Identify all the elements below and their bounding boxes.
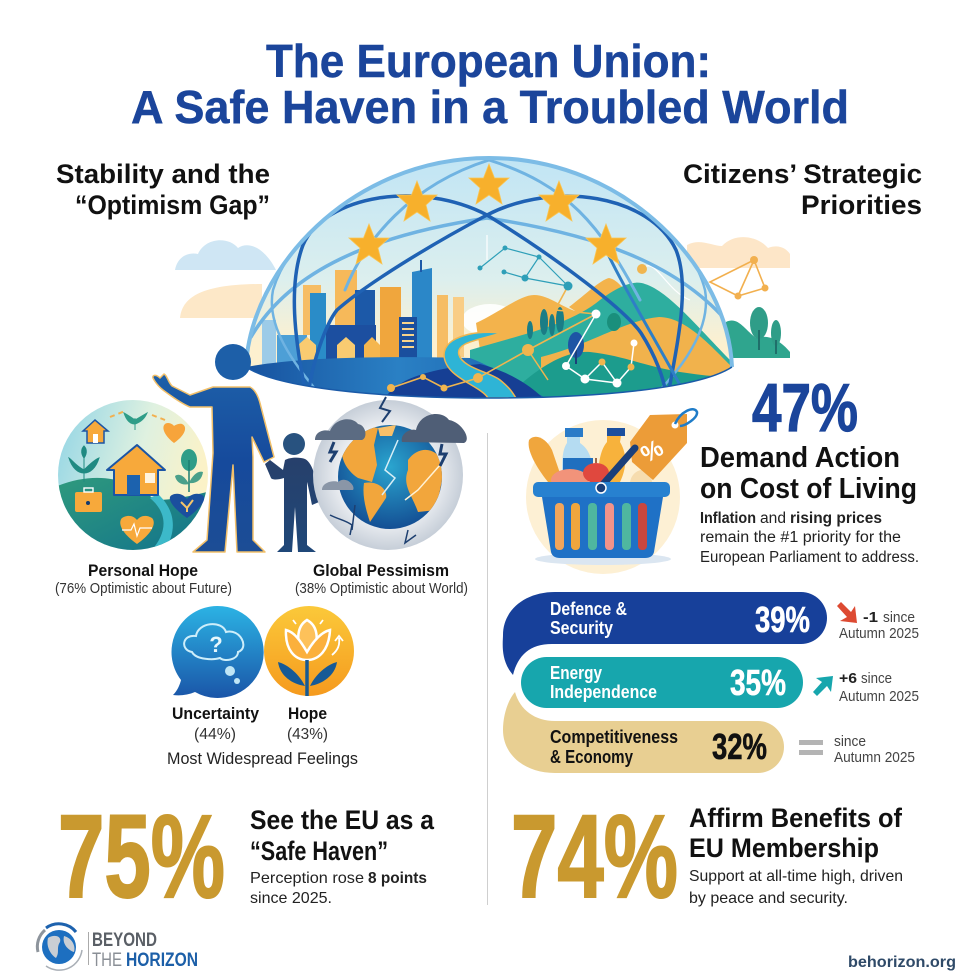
trend: defence down 1: -1 [863, 609, 878, 626]
trend: competitiveness unchanged [799, 733, 915, 766]
label: hope [287, 704, 328, 743]
stat: 74 percent affirm benefits: 74% [511, 791, 678, 923]
adult figure [153, 344, 274, 552]
child figure [265, 433, 319, 552]
label: uncertainty [172, 704, 260, 743]
website url: behorizon.org [848, 954, 956, 971]
ribbon bar: energy independence: 35% [730, 662, 786, 703]
stat: 47 percent: 47% [752, 370, 858, 446]
heading: demand action on cost of living: on Cost of Living [700, 473, 917, 505]
heading: demand action on cost of living [700, 442, 917, 505]
label: global pessimism: Global Pessimism [313, 561, 449, 580]
label: personal hope: (76% Optimistic about Future) [55, 580, 232, 597]
stat: 74 percent affirm benefits: Support at all-time high, driven [689, 868, 903, 885]
label: personal hope [55, 561, 232, 597]
divider [487, 433, 488, 905]
stat: 74 percent affirm benefits [511, 791, 903, 923]
ribbon bar: competitiveness and economy [503, 692, 784, 773]
ribbon bar: energy independence: Energy [550, 663, 602, 683]
title: The European Union: [266, 35, 711, 87]
stat: 74 percent affirm benefits: Affirm Benefits of [689, 803, 903, 833]
heading: stability and the optimism gap: Stability and the [56, 159, 270, 189]
text: cost of living explanation: rising prices [790, 510, 882, 527]
ribbon bar: defence and security: Security [550, 618, 613, 638]
label: global pessimism [295, 561, 468, 597]
heading: citizens strategic priorities: Citizens’ Strategic [683, 159, 922, 189]
icon: personal hope circle [58, 400, 208, 550]
text: cost of living explanation: Inflation [700, 510, 756, 527]
title [131, 35, 849, 133]
heading: stability and the optimism gap [56, 159, 270, 220]
price tag: % [636, 434, 668, 469]
icon: uncertainty speech bubble: ? [209, 632, 223, 657]
logo: beyond the horizon [37, 924, 198, 971]
trend: defence down 1: since [883, 609, 915, 626]
stat: 75 percent safe haven: “Safe Haven” [250, 836, 388, 866]
ribbon bar: competitiveness and economy: Competitiveness [550, 727, 678, 747]
stat: 75 percent safe haven: Perception rose [250, 870, 364, 887]
logo: beyond the horizon: HORIZON [126, 950, 198, 971]
EU stars [349, 164, 626, 264]
caption: most widespread feelings: Most Widespread Feelings [167, 749, 358, 768]
stat: 75 percent safe haven [58, 791, 435, 923]
heading: stability and the optimism gap: “Optimism Gap” [75, 190, 270, 220]
city skyline [262, 260, 518, 365]
illustration: glass dome over city and landscape [240, 150, 740, 410]
ribbon bar: energy independence: Independence [550, 682, 657, 702]
icon: global pessimism stormy globe [313, 397, 467, 550]
trend: defence down 1 [837, 602, 919, 642]
ribbon bar: defence and security [503, 592, 827, 675]
stat: 75 percent safe haven: 8 points [368, 870, 427, 887]
trend: energy up 6: Autumn 2025 [839, 688, 919, 705]
heading: citizens strategic priorities [683, 159, 922, 220]
stat: 75 percent safe haven: 75% [58, 791, 225, 923]
ribbon bar: defence and security: Defence & [550, 599, 627, 619]
trend: competitiveness unchanged: since [834, 733, 866, 750]
label: uncertainty: Uncertainty [172, 704, 260, 723]
price tag [630, 409, 697, 480]
logo: beyond the horizon: THE [92, 950, 122, 971]
title: A Safe Haven in a Troubled World [131, 81, 849, 133]
ribbon bar: energy independence [521, 657, 803, 708]
stat: 75 percent safe haven: See the EU as a [250, 805, 435, 835]
icon: adult and child silhouettes [153, 344, 319, 552]
text: cost of living explanation [700, 510, 919, 566]
ribbon bar: defence and security: 39% [755, 599, 810, 640]
ribbon bar: competitiveness and economy: & Economy [550, 747, 633, 767]
trend: defence down 1: Autumn 2025 [839, 625, 919, 642]
trend: competitiveness unchanged: Autumn 2025 [834, 749, 915, 766]
heading: citizens strategic priorities: Priorities [801, 190, 922, 220]
stat: 74 percent affirm benefits: EU Membership [689, 833, 879, 863]
heading: demand action on cost of living: Demand Action [700, 442, 900, 474]
icon: uncertainty speech bubble [171, 606, 264, 698]
text: cost of living explanation: remain the #1 priority for the [700, 529, 901, 546]
text: cost of living explanation: European Parliament to address. [700, 549, 919, 566]
label: hope: Hope [288, 704, 327, 723]
icon: hope tulip [264, 606, 354, 696]
label: global pessimism: (38% Optimistic about World) [295, 580, 468, 597]
text: cost of living explanation: and [760, 510, 786, 527]
logo: beyond the horizon: BEYOND [92, 930, 157, 951]
dome lattice [251, 160, 730, 397]
network lines [387, 235, 690, 392]
stat: 75 percent safe haven: since 2025. [250, 890, 332, 907]
hills [246, 278, 735, 400]
stat: 74 percent affirm benefits: by peace and security. [689, 890, 848, 907]
trend: energy up 6: since [861, 670, 892, 687]
label: personal hope: Personal Hope [88, 561, 198, 580]
trend: energy up 6 [813, 670, 919, 705]
label: hope: (43%) [287, 726, 328, 743]
illustration: background clouds and outside landscape [175, 237, 790, 358]
label: uncertainty: (44%) [194, 726, 236, 743]
trend: energy up 6: +6 [839, 670, 857, 687]
ribbon bar: competitiveness and economy: 32% [712, 726, 767, 767]
icon: shopping basket with price tag [526, 409, 697, 574]
